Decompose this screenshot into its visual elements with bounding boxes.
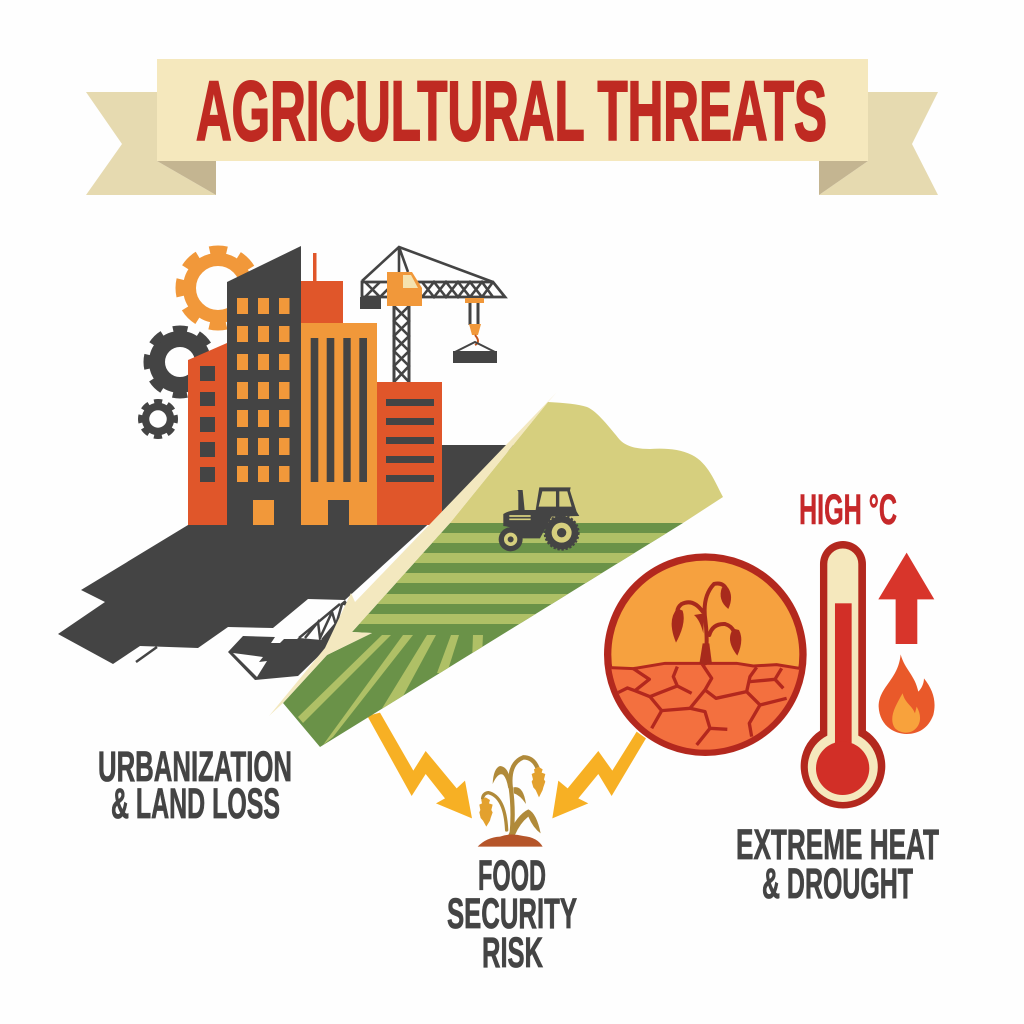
- crane hook and load: [453, 298, 497, 363]
- banner left fold: [157, 161, 216, 195]
- wilted plant: [672, 583, 741, 664]
- label: urbanization and land loss: [98, 743, 292, 828]
- banner left ribbon tail: [86, 92, 216, 195]
- arrow: right lightning to food risk: [552, 732, 646, 818]
- ground shadow lower fragment: [136, 600, 352, 680]
- label: urbanization and land loss: & LAND LOSS: [111, 780, 280, 828]
- label: food security risk: RISK: [482, 929, 543, 977]
- plant stems: [483, 757, 538, 835]
- label: food security risk: SECURITY: [447, 890, 577, 938]
- icon: large dark gear: [148, 330, 212, 394]
- soil mound: [478, 834, 543, 847]
- icon: orange gear: [180, 250, 256, 326]
- crane: [360, 247, 505, 382]
- thermometer icon: [801, 541, 885, 809]
- plant leaves: [493, 766, 541, 835]
- banner main panel: [157, 59, 868, 161]
- thermometer mercury column: [835, 603, 852, 750]
- thermometer mercury bulb: [816, 742, 869, 795]
- label: food security risk: FOOD: [478, 852, 546, 900]
- cream lightning divider: [269, 392, 557, 716]
- building: right red block: [377, 382, 442, 525]
- arrow: left lightning to food risk: [367, 713, 472, 818]
- thermometer inner cream: [808, 548, 878, 802]
- thermometer outer shell: [801, 541, 885, 809]
- hill background: [450, 402, 723, 523]
- label: extreme heat and drought: [736, 821, 939, 908]
- banner right ribbon tail: [819, 92, 938, 195]
- crane jib: [362, 247, 505, 297]
- crane mast: [394, 306, 409, 382]
- label: high temperature: HIGH °C: [799, 486, 897, 534]
- crop field rows: [270, 523, 700, 753]
- building: dark tower: [227, 246, 301, 525]
- label: urbanization and land loss: URBANIZATION: [98, 743, 292, 791]
- icon: tractor: [499, 487, 579, 551]
- drought disc icon: [603, 557, 810, 760]
- icon: flame: [879, 654, 935, 734]
- crane cab: [387, 272, 422, 306]
- arrow: temperature rising: [878, 553, 934, 644]
- label: food security risk: [447, 852, 577, 977]
- farmland wedge: [269, 392, 723, 753]
- building: rear red block with antenna: [300, 253, 343, 325]
- sky fill and ring: [608, 557, 803, 752]
- urban scene: city, gears and crane: [58, 246, 515, 680]
- building: left red block: [188, 343, 227, 525]
- crane counterweight: [360, 297, 381, 309]
- label: extreme heat and drought: & DROUGHT: [762, 860, 913, 908]
- cracked soil: [611, 662, 800, 750]
- icon: small dark gear: [140, 402, 176, 436]
- building: orange block: [301, 323, 377, 525]
- wheat ears: [479, 767, 545, 827]
- banner right fold: [819, 161, 868, 195]
- title banner: [86, 59, 938, 195]
- icon: wilted wheat plant: [478, 757, 545, 847]
- dark ground shadow: [58, 445, 515, 664]
